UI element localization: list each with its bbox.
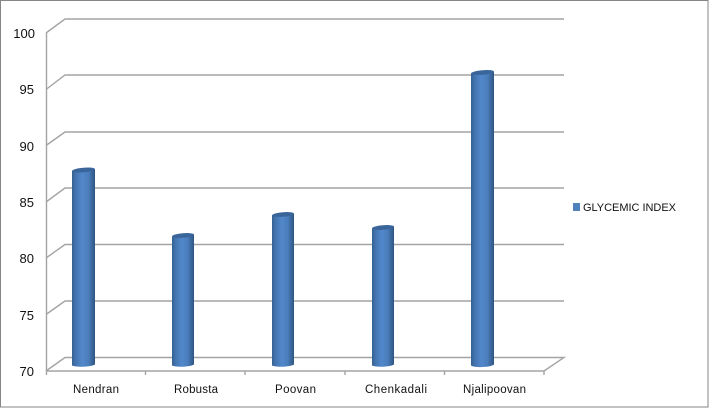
y axis labels: 100: [13, 26, 35, 41]
y axis labels: 90: [20, 139, 34, 154]
bar: Nendran: [72, 167, 95, 367]
bar: Robusta: [172, 232, 194, 367]
x axis labels: Chenkadali: [365, 384, 427, 396]
legend: GLYCEMIC INDEX: [583, 202, 677, 214]
bar: Njalipoovan: [471, 69, 494, 367]
x axis labels: Nendran: [73, 384, 119, 396]
y axis labels: [13, 26, 35, 379]
y axis labels: 70: [20, 364, 34, 379]
y axis labels: 80: [20, 251, 34, 266]
y axis labels: 95: [20, 82, 34, 97]
bar: Chenkadali: [372, 224, 394, 367]
x axis labels: Njalipoovan: [463, 384, 526, 396]
x axis labels: [73, 384, 526, 396]
bar: Poovan: [272, 211, 294, 367]
y axis labels: 75: [20, 308, 34, 323]
x axis labels: Robusta: [174, 384, 219, 396]
y axis labels: 85: [20, 195, 34, 210]
y axis: [46, 33, 544, 375]
x axis labels: Poovan: [275, 384, 316, 396]
